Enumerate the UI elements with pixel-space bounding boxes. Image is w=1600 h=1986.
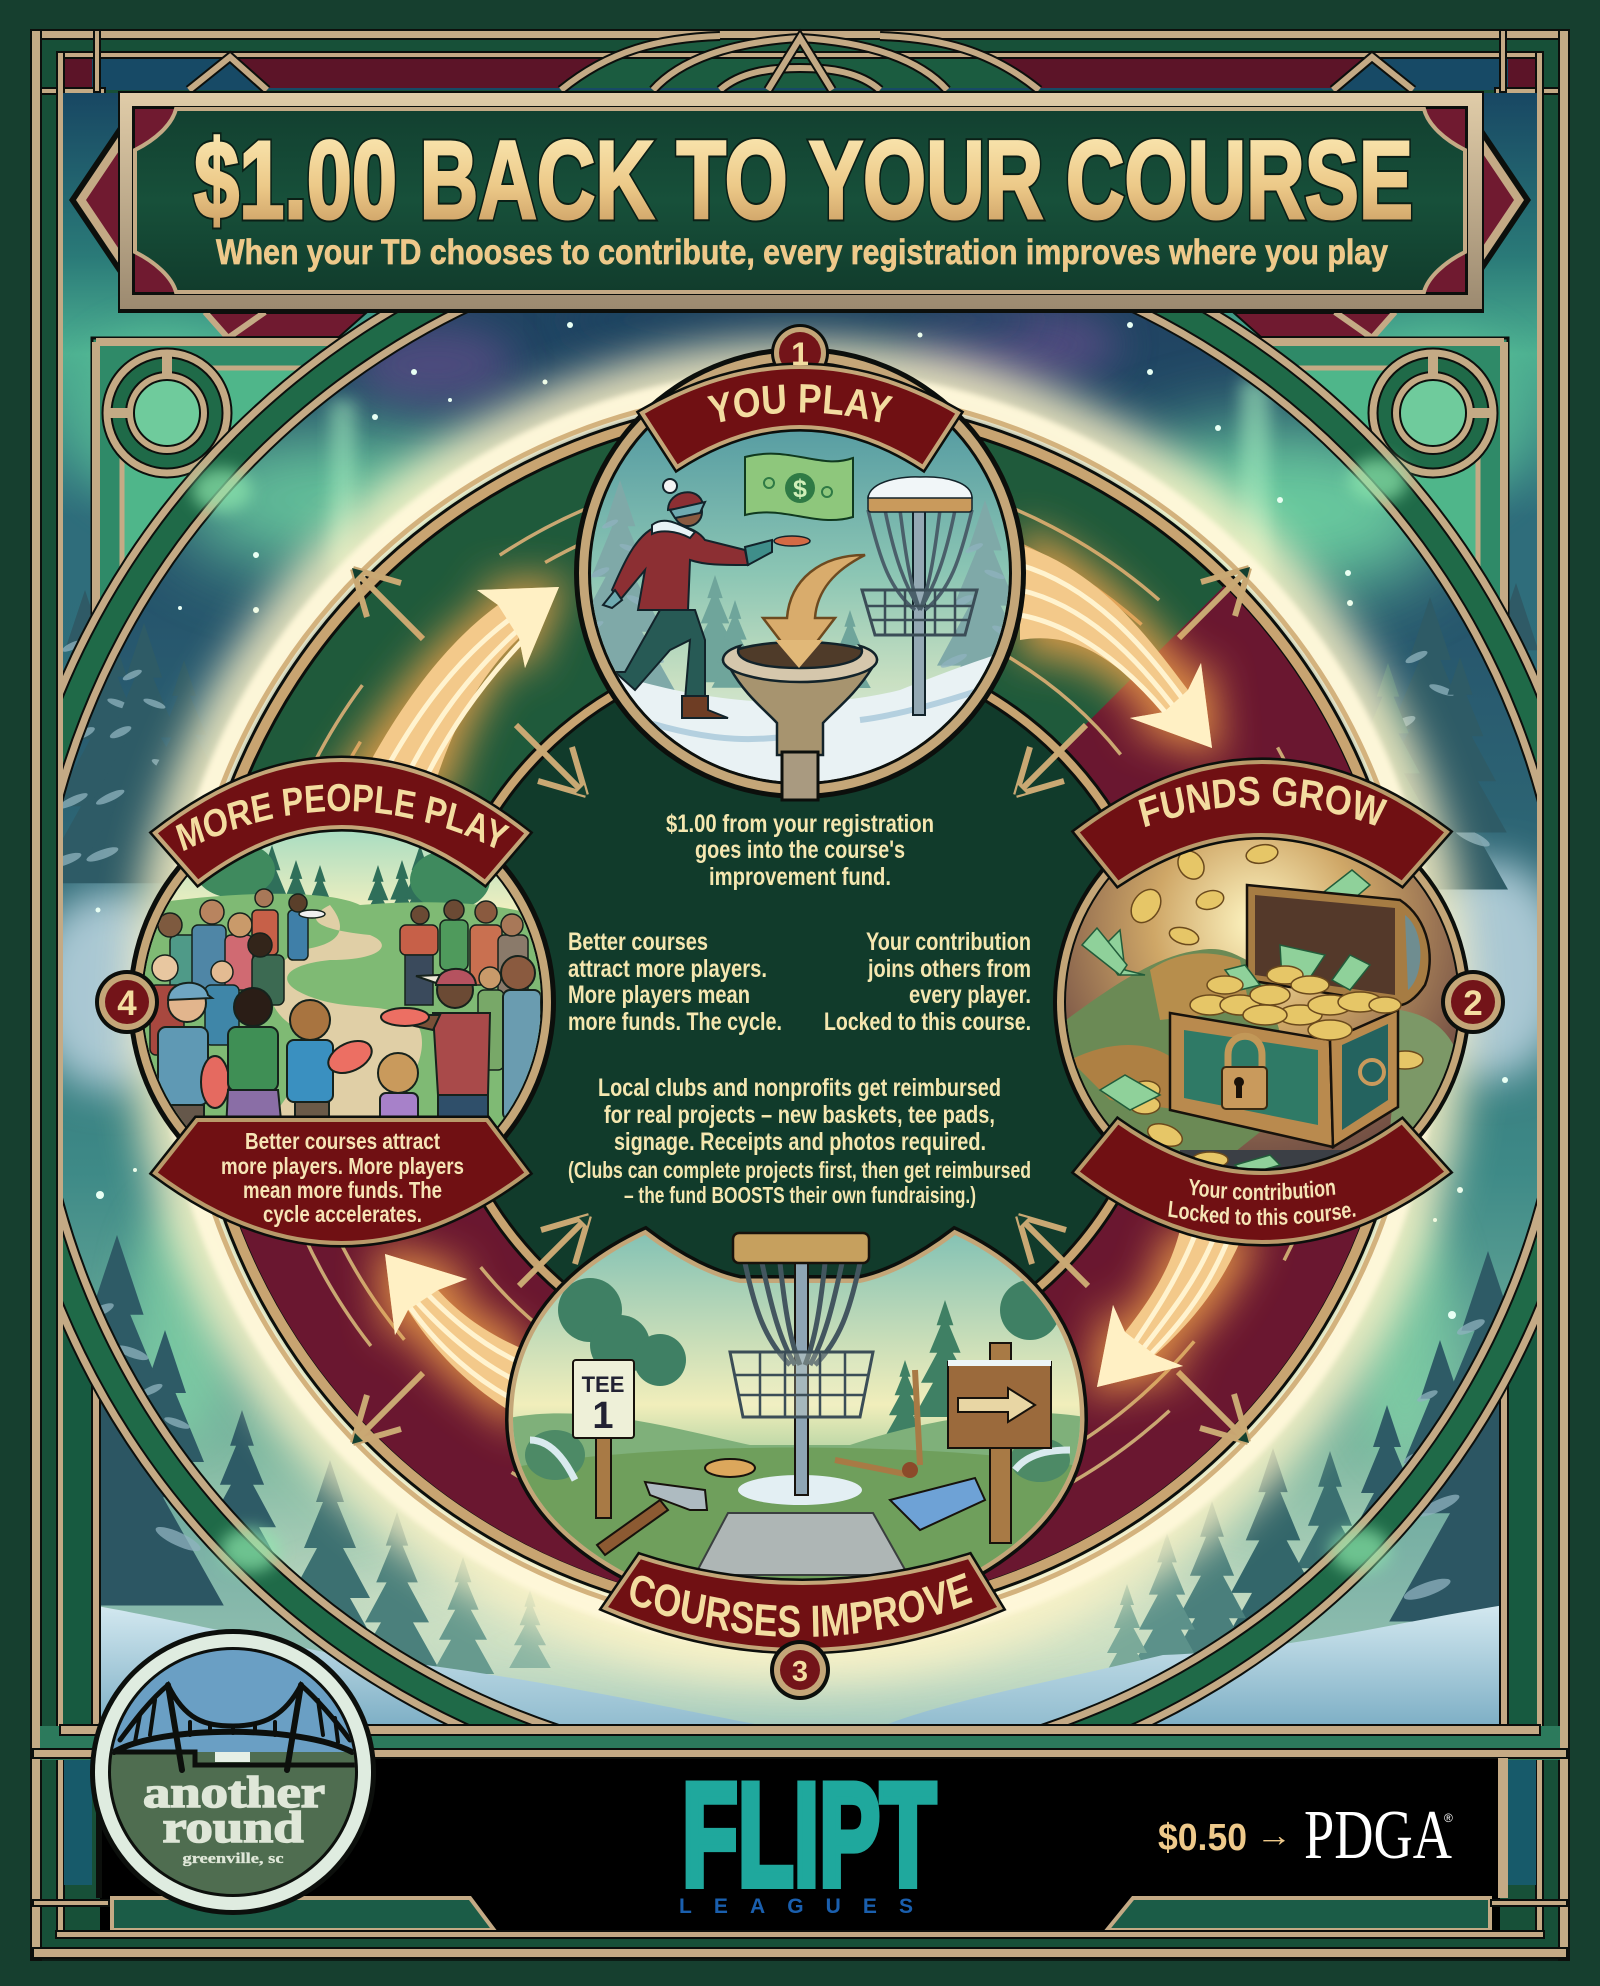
text: step 1 explanation: $1.00 from your registration bbox=[666, 810, 934, 838]
tee sign bbox=[573, 1360, 634, 1518]
banner: funds grow caption: Locked to this course. bbox=[1168, 1200, 1356, 1226]
rim of basket bbox=[733, 1233, 869, 1263]
text: step 3 explanation: (Clubs can complete projects first, then get reimbursed bbox=[568, 1157, 1031, 1183]
foreground players bbox=[158, 956, 541, 1135]
banner: funds grow: FUNDS GROW bbox=[1138, 776, 1388, 828]
logo wordmark: greenville, sc bbox=[182, 1851, 284, 1867]
thin ring lines bbox=[255, 465, 1345, 1555]
dropped disc bbox=[705, 1459, 755, 1477]
corner ornaments and side strips bbox=[63, 338, 1537, 1730]
stars bbox=[96, 298, 1508, 1319]
banner: courses improve: COURSES IMPROVE bbox=[630, 1572, 973, 1638]
footer bar bbox=[33, 1725, 1567, 1958]
coins in chest bbox=[1190, 966, 1401, 1040]
text: step 2 explanation bbox=[824, 928, 1031, 1036]
subtitle: When your TD chooses to contribute, every registration improves where you play bbox=[216, 233, 1388, 272]
cycle ring bbox=[165, 375, 1435, 1645]
step 1: you play bbox=[574, 324, 1026, 802]
center basket bbox=[730, 1250, 873, 1495]
player bbox=[603, 479, 772, 718]
badge 3 bbox=[770, 1640, 830, 1700]
banner: more people caption: cycle accelerates. bbox=[263, 1201, 422, 1227]
text: step 1 explanation: improvement fund. bbox=[709, 863, 891, 891]
center explanations bbox=[568, 810, 1031, 1208]
step 3: courses improve bbox=[505, 1226, 1088, 1700]
step 4: more people play bbox=[95, 756, 556, 1248]
flow arrow: funds grow to courses improve bbox=[1087, 1230, 1260, 1397]
text: step 2 explanation: joins others from bbox=[867, 955, 1031, 983]
snow mound bbox=[738, 1475, 862, 1505]
banner: more people caption bbox=[155, 1120, 527, 1243]
badge 2 bbox=[1441, 970, 1505, 1034]
banner: you play bbox=[636, 324, 964, 474]
step 2: funds grow bbox=[1053, 757, 1505, 1247]
side snow glow bbox=[20, 850, 1580, 1090]
logo wordmark: round bbox=[162, 1803, 304, 1852]
snow drifts bbox=[101, 1606, 444, 1724]
background players bbox=[150, 889, 528, 1070]
pdga contribution: → bbox=[1256, 1817, 1292, 1853]
banner: more people play: MORE PEOPLE PLAY bbox=[176, 784, 510, 851]
tee pad bbox=[695, 1513, 908, 1575]
text: step 3 explanation: signage. Receipts and photos required. bbox=[614, 1128, 986, 1156]
pdga contribution bbox=[1158, 1797, 1453, 1874]
hammer bbox=[597, 1482, 707, 1555]
text: step 1 explanation: goes into the course's bbox=[695, 836, 905, 864]
text: step 4 explanation: attract more players. bbox=[568, 955, 767, 983]
lower side pines bbox=[26, 1235, 1587, 1622]
arrow sign bbox=[948, 1343, 1051, 1543]
chest lid bbox=[1247, 885, 1430, 1005]
pines inside arch bbox=[18, 597, 1587, 1682]
text: step 4 explanation: More players mean bbox=[568, 981, 750, 1009]
flow arrow: more people to you play bbox=[320, 577, 569, 800]
banner: more people caption: mean more funds. The bbox=[243, 1177, 442, 1203]
plaque side points bbox=[69, 105, 1531, 295]
top left corner panel bbox=[90, 336, 338, 616]
snow hills bbox=[426, 1665, 754, 1724]
pdga contribution: ® bbox=[1444, 1811, 1453, 1825]
banner: funds grow caption: Your contribution bbox=[1189, 1178, 1336, 1200]
banner: more people play bbox=[148, 756, 534, 888]
text: step 2 explanation: Your contribution bbox=[866, 928, 1031, 956]
padlock bbox=[1222, 1036, 1267, 1109]
sky inside arch bbox=[63, 313, 1537, 1724]
flipt leagues logo: LEAGUES bbox=[679, 1895, 913, 1918]
logo wordmark bbox=[143, 1768, 325, 1867]
rake bbox=[835, 1370, 920, 1475]
text: step 4 explanation bbox=[568, 928, 782, 1036]
funnel bbox=[723, 640, 877, 755]
banner: you play: 1 bbox=[791, 336, 809, 372]
tee sign: 1 bbox=[592, 1395, 614, 1437]
ring glow bbox=[165, 375, 1435, 1645]
basket bbox=[862, 477, 977, 715]
badge 4: 4 bbox=[117, 984, 137, 1023]
lower side strips bbox=[63, 1329, 1537, 1724]
burgundy segment bbox=[200, 586, 1400, 1611]
scene: crowd on fairway bbox=[140, 800, 550, 1210]
thin connector arrows bbox=[352, 567, 1250, 1444]
chest body bbox=[1170, 1013, 1333, 1147]
text: step 2 explanation: Locked to this course. bbox=[824, 1008, 1031, 1036]
title plaque bbox=[69, 91, 1531, 313]
banner: funds grow caption bbox=[1070, 1116, 1454, 1247]
flipt leagues logo: FLIPT bbox=[682, 1753, 936, 1916]
flow arrow: courses improve to more people bbox=[375, 1244, 525, 1435]
text: step 3 explanation: Local clubs and nonprofits get reimbursed bbox=[598, 1074, 1001, 1102]
badge 2: 2 bbox=[1463, 984, 1483, 1023]
badge 4 bbox=[95, 970, 159, 1034]
scene: player, bill, funnel, basket bbox=[591, 430, 1009, 782]
text: step 4 explanation: Better courses bbox=[568, 928, 708, 956]
text: step 3 explanation: – the fund BOOSTS their own fundraising.) bbox=[624, 1182, 976, 1208]
bridge bbox=[100, 1685, 360, 1770]
center disc bbox=[434, 644, 1166, 1376]
aurora glow bbox=[130, 280, 1456, 1700]
banner: funds grow bbox=[1070, 757, 1454, 889]
winding path bbox=[270, 905, 422, 1120]
badge 3: 3 bbox=[792, 1656, 808, 1688]
outer arch band bbox=[63, 313, 1537, 1724]
top right corner panel bbox=[1262, 336, 1510, 616]
flipt leagues logo bbox=[679, 1753, 936, 1918]
side snow bbox=[30, 860, 1570, 1090]
blueprint bbox=[890, 1478, 985, 1530]
text: step 3 explanation: for real projects – new baskets, tee pads, bbox=[604, 1101, 995, 1129]
pdga contribution: $0.50 bbox=[1158, 1817, 1247, 1859]
scene: tee sign, tools bbox=[500, 1225, 1100, 1640]
logo wordmark: another bbox=[143, 1768, 325, 1817]
tee sign: TEE bbox=[582, 1372, 624, 1397]
banner: you play: YOU PLAY bbox=[707, 384, 893, 422]
upper side pines bbox=[12, 583, 1599, 895]
bill bbox=[745, 454, 853, 520]
ring base green bbox=[194, 404, 1406, 1616]
banner: more people caption: more players. More players bbox=[221, 1153, 464, 1179]
text: step 1 explanation bbox=[666, 810, 934, 891]
pdga contribution: PDGA bbox=[1304, 1797, 1452, 1874]
text: step 4 explanation: more funds. The cycle. bbox=[568, 1008, 782, 1036]
another round logo bbox=[90, 1629, 376, 1915]
banner: more people caption: Better courses attract bbox=[245, 1128, 440, 1154]
scene: treasure chest bbox=[1060, 800, 1470, 1210]
curved arrow bbox=[763, 555, 865, 665]
flow arrow: you play to funds grow bbox=[1020, 525, 1222, 758]
text: step 2 explanation: every player. bbox=[909, 981, 1031, 1009]
bill: $ bbox=[793, 475, 807, 503]
text: step 3 explanation bbox=[568, 1074, 1031, 1208]
